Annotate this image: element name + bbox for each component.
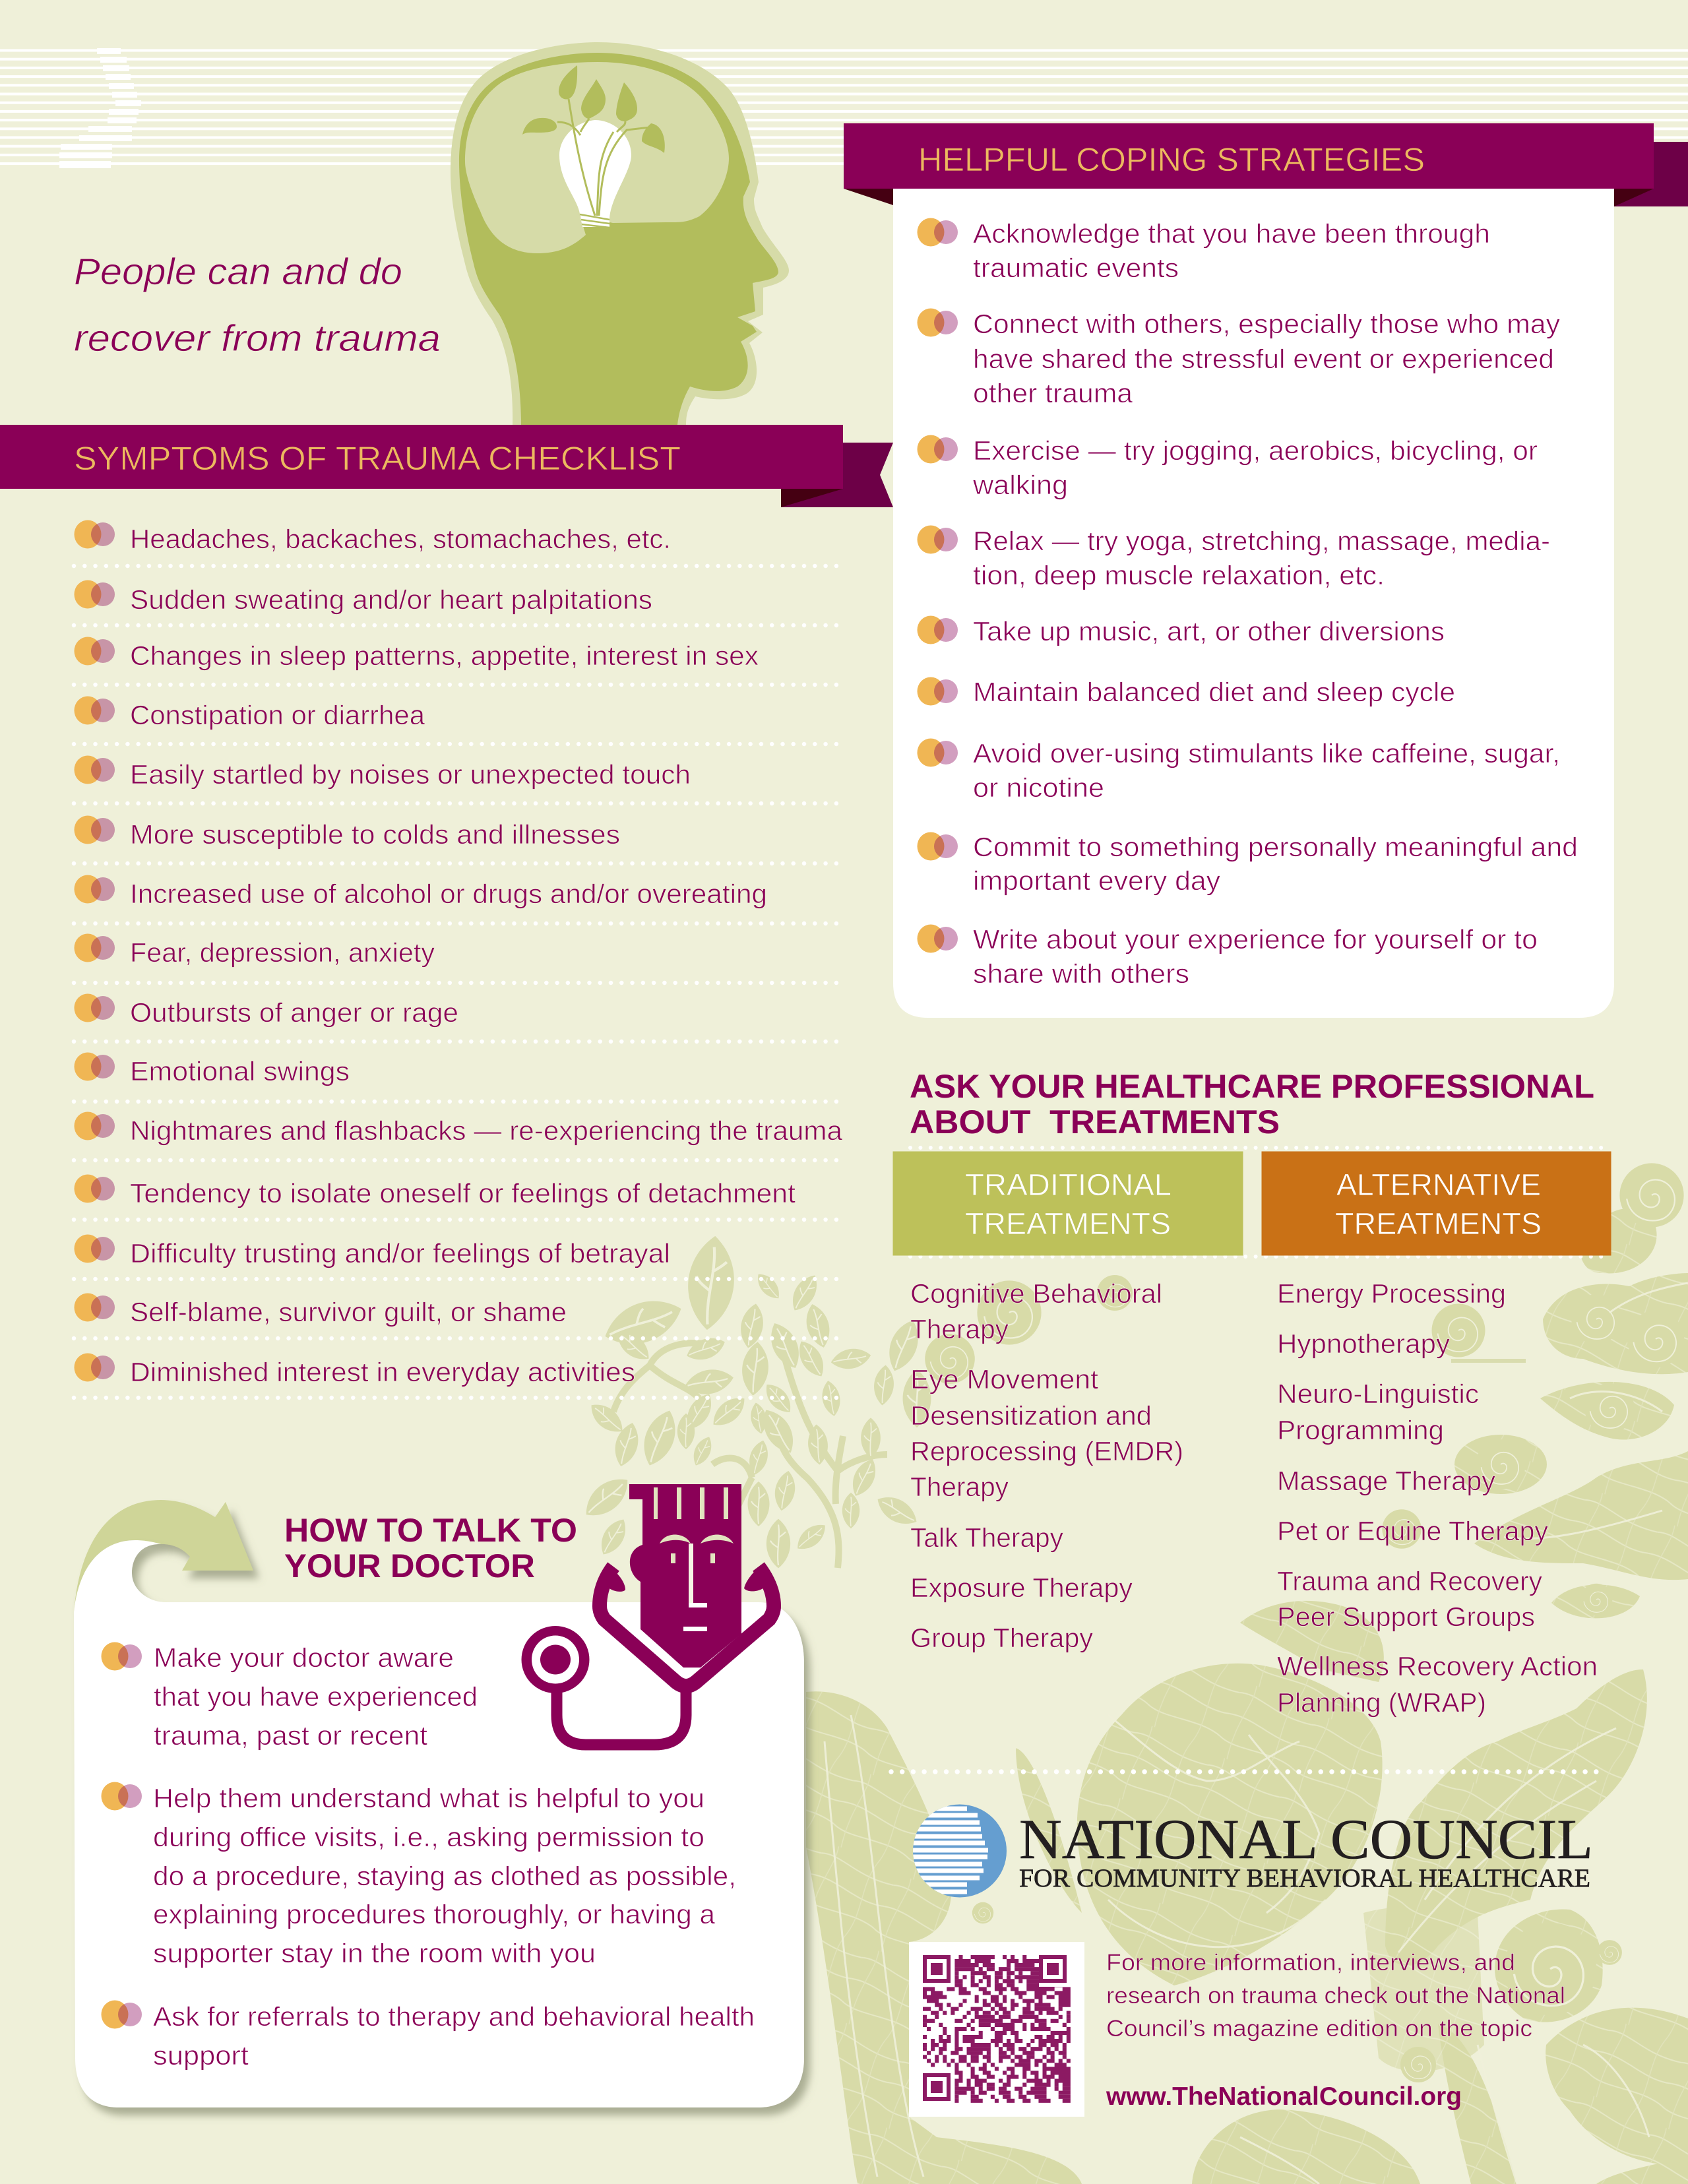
alternative list: Planning (WRAP) — [1277, 1687, 1486, 1718]
checklist items: Headaches, backaches, stomachaches, etc. — [130, 524, 671, 554]
traditional header: TRADITIONAL — [965, 1168, 1172, 1202]
coping list: traumatic events — [973, 253, 1179, 283]
checklist items: Fear, depression, anxiety — [130, 937, 435, 968]
banner: symptoms ribbon — [0, 425, 893, 507]
coping list: tion, deep muscle relaxation, etc. — [973, 560, 1385, 590]
alternative list: Wellness Recovery Action — [1277, 1651, 1598, 1681]
banner: symptoms ribbon: SYMPTOMS OF TRAUMA CHECKLIST — [74, 440, 681, 477]
doctor tips: support — [153, 2040, 249, 2071]
checklist items: Emotional swings — [130, 1056, 350, 1086]
alternative list: Peer Support Groups — [1277, 1602, 1535, 1632]
more information text — [1106, 1950, 1565, 2042]
coping list: Exercise — try jogging, aerobics, bicycling, or — [973, 435, 1538, 466]
coping list: have shared the stressful event or experienced — [973, 344, 1554, 374]
white card — [893, 189, 1614, 1018]
alternative list: Programming — [1277, 1415, 1444, 1445]
tagline: recover from trauma — [74, 317, 441, 359]
vine leaves — [578, 1234, 931, 1568]
coping list: Relax — try yoga, stretching, massage, media- — [973, 526, 1550, 556]
checklist items: Changes in sleep patterns, appetite, interest in sex — [130, 640, 759, 671]
section: symptoms checklist — [0, 425, 893, 1398]
checklist items: Easily startled by noises or unexpected touch — [130, 759, 691, 790]
doctor tips: Make your doctor aware — [154, 1642, 454, 1673]
panel: alternative treatments — [1262, 1152, 1611, 1718]
panel: traditional treatments — [893, 1152, 1243, 1653]
coping list: share with others — [973, 958, 1189, 989]
alternative header: ALTERNATIVE — [1336, 1168, 1541, 1202]
coping list: walking — [972, 470, 1068, 500]
coping list: Connect with others, especially those who may — [973, 309, 1561, 339]
vine stems — [613, 1343, 887, 1568]
doctor tips: trauma, past or recent — [154, 1720, 428, 1751]
more information text: Council’s magazine edition on the topic — [1106, 2016, 1532, 2042]
arrow — [74, 1500, 253, 1613]
checklist items: Difficulty trusting and/or feelings of betrayal — [130, 1238, 670, 1268]
traditional header — [893, 1152, 1243, 1255]
coping list — [917, 218, 1578, 989]
logo wordmark: FOR COMMUNITY BEHAVIORAL HEALTHCARE — [1019, 1864, 1590, 1892]
checklist items: Outbursts of anger or rage — [130, 997, 458, 1028]
alternative list — [1277, 1278, 1598, 1718]
traditional list: Group Therapy — [910, 1623, 1093, 1653]
alternative list: Pet or Equine Therapy — [1277, 1516, 1549, 1546]
more information text: research on trauma check out the National — [1106, 1983, 1565, 2009]
alternative header: TREATMENTS — [1335, 1206, 1542, 1241]
coping list: or nicotine — [973, 772, 1104, 803]
alternative list: Massage Therapy — [1277, 1466, 1496, 1496]
checklist items: More susceptible to colds and illnesses — [130, 819, 620, 850]
doctor tips: do a procedure, staying as clothed as possible, — [153, 1861, 736, 1891]
checklist items: Self-blame, survivor guilt, or shame — [130, 1297, 567, 1327]
qr code — [909, 1942, 1084, 2117]
alternative list: Hypnotherapy — [1277, 1328, 1451, 1359]
doctor tips: Ask for referrals to therapy and behavioral health — [153, 2001, 755, 2032]
traditional list: Exposure Therapy — [910, 1573, 1133, 1603]
checklist items: Constipation or diarrhea — [130, 700, 425, 730]
tagline — [74, 251, 441, 359]
panel: helpful coping strategies — [844, 123, 1688, 1018]
heading: ask your healthcare professional — [910, 1068, 1594, 1140]
traditional list: Therapy — [910, 1314, 1009, 1344]
traditional list: Eye Movement — [910, 1364, 1099, 1394]
traditional list — [910, 1278, 1183, 1653]
traditional list: Talk Therapy — [910, 1522, 1063, 1553]
heading — [284, 1512, 577, 1584]
coping list: Avoid over-using stimulants like caffeine, sugar, — [973, 738, 1560, 768]
traditional list: Cognitive Behavioral — [910, 1278, 1162, 1309]
icon: doctor with stethoscope — [521, 1484, 774, 1745]
doctor tips: Help them understand what is helpful to you — [153, 1783, 704, 1813]
decorative stripes — [0, 48, 1688, 168]
traditional list: Therapy — [910, 1472, 1009, 1502]
panel: how to talk to your doctor — [74, 1484, 804, 2107]
doctor tips: that you have experienced — [154, 1681, 478, 1712]
tagline: People can and do — [74, 251, 402, 293]
coping list: Take up music, art, or other diversions — [973, 616, 1445, 646]
traditional list: Desensitization and — [910, 1400, 1152, 1431]
coping list: Acknowledge that you have been through — [973, 218, 1490, 249]
heading: HOW TO TALK TO — [284, 1512, 577, 1549]
more information text: For more information, interviews, and — [1106, 1950, 1515, 1976]
doctor tips: during office visits, i.e., asking permission to — [153, 1822, 704, 1852]
ribbon tail — [844, 142, 1688, 206]
banner: HELPFUL COPING STRATEGIES — [918, 141, 1425, 178]
checklist items: Nightmares and flashbacks — re-experiencing the trauma — [130, 1115, 842, 1146]
coping list: Commit to something personally meaningful and — [973, 832, 1578, 862]
checklist items — [74, 520, 842, 1387]
background woodcut artwork — [578, 1163, 1688, 2184]
checklist items: Increased use of alcohol or drugs and/or overeating — [130, 879, 767, 909]
website url: www.TheNationalCouncil.org — [1106, 2082, 1462, 2111]
alternative list: Energy Processing — [1277, 1278, 1506, 1309]
logo mark — [913, 1805, 1007, 1897]
coping list: important every day — [973, 865, 1221, 896]
heading: ask your healthcare professional: ABOUT TREATMENTS — [910, 1104, 1280, 1140]
alternative list: Neuro-Linguistic — [1277, 1379, 1479, 1409]
swirls — [925, 1163, 1684, 2082]
doctor tips: supporter stay in the room with you — [153, 1938, 596, 1968]
doctor tips — [102, 1642, 755, 2071]
checklist items: Tendency to isolate oneself or feelings of detachment — [130, 1178, 796, 1208]
traditional list: Reprocessing (EMDR) — [910, 1436, 1183, 1466]
logo wordmark: NATIONAL COUNCIL — [1019, 1807, 1593, 1871]
icon: head with lightbulb and plant — [451, 42, 789, 425]
coping list: Write about your experience for yourself or to — [973, 924, 1538, 954]
white card — [74, 1540, 804, 2107]
alternative list: Trauma and Recovery — [1277, 1566, 1542, 1596]
traditional header: TREATMENTS — [965, 1206, 1171, 1241]
logo: national council — [913, 1805, 1593, 1897]
checklist items: Diminished interest in everyday activities — [130, 1357, 635, 1387]
heading: YOUR DOCTOR — [284, 1547, 535, 1584]
coping list: other trauma — [973, 378, 1133, 408]
doctor tips: explaining procedures thoroughly, or having a — [153, 1899, 715, 1929]
alternative header — [1262, 1152, 1611, 1255]
banner — [844, 123, 1654, 189]
coping list: Maintain balanced diet and sleep cycle — [973, 677, 1455, 707]
checklist items: Sudden sweating and/or heart palpitations — [130, 584, 652, 615]
heading: ask your healthcare professional: ASK YOUR HEALTHCARE PROFESSIONAL — [910, 1068, 1594, 1105]
